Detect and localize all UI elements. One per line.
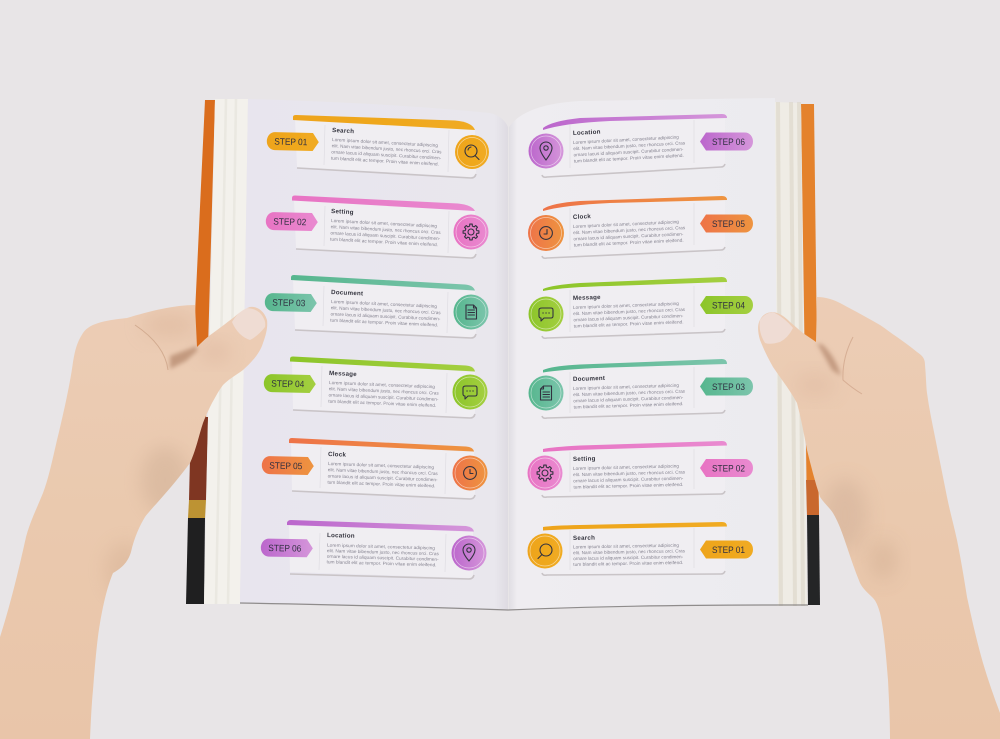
step card: Setting (left): tum blandit elit ac tempor. Proin vitae enim eleifend. bbox=[330, 237, 438, 247]
right page bbox=[509, 98, 778, 610]
step card: Clock (left) bbox=[262, 438, 488, 499]
step card: Setting (left): ornare lacus id aliquam suscipit. Curabitur condimen- bbox=[330, 230, 441, 241]
step card: Message (left): elit. Nam vitae bibendum justo, nec rhoncus orci. Cras bbox=[329, 386, 440, 396]
step card: Document (left): Document bbox=[331, 289, 363, 297]
right page stack bbox=[774, 102, 807, 606]
step card: Setting (left): Setting bbox=[331, 208, 354, 216]
step card: Location (left): tum blandit elit ac tempor. Proin vitae enim eleifend. bbox=[327, 559, 437, 567]
step card: Location (right): ornare lacus id aliquam suscipit. Curabitur condimen- bbox=[573, 147, 684, 157]
step card: Document (left): STEP 03 bbox=[272, 298, 305, 308]
left hand bbox=[0, 290, 280, 739]
step card: Search (right): tum blandit elit ac tempor. Proin vitae enim eleifend. bbox=[573, 560, 683, 567]
step card: Document (left): ornare lacus id aliquam suscipit. Curabitur condimen- bbox=[330, 311, 441, 321]
step card: Clock (left): ornare lacus id aliquam suscipit. Curabitur condimen- bbox=[328, 473, 438, 482]
step card: Document (right): elit. Nam vitae bibendum justo, nec rhoncus orci. Cras bbox=[573, 389, 686, 397]
step card: Clock (left): Lorem ipsum dolor sit amet, consectetur adipiscing bbox=[328, 461, 435, 470]
step card: Message (right) bbox=[528, 277, 753, 338]
step card: Location (left): Lorem ipsum dolor sit amet, consectetur adipiscing bbox=[327, 543, 436, 551]
step card: Search (right): Lorem ipsum dolor sit amet, consectetur adipiscing bbox=[573, 543, 680, 549]
step card: Message (right): Message bbox=[573, 294, 601, 302]
step card: Document (right): tum blandit elit ac tempor. Proin vitae enim eleifend. bbox=[573, 401, 684, 410]
step card: Message (left): Lorem ipsum dolor sit amet, consectetur adipiscing bbox=[329, 380, 436, 389]
step card: Search (left): Lorem ipsum dolor sit amet, consectetur adipiscing bbox=[332, 137, 439, 148]
step card: Clock (right): elit. Nam vitae bibendum justo, nec rhoncus orci. Cras bbox=[573, 225, 686, 235]
step card: Search (right) bbox=[528, 522, 753, 575]
step card: Clock (right): tum blandit elit ac tempor. Proin vitae enim eleifend. bbox=[574, 238, 684, 248]
step card: Message (left) bbox=[264, 356, 488, 418]
step card: Location (left): Location bbox=[327, 532, 355, 540]
step card: Search (left): STEP 01 bbox=[274, 137, 307, 147]
step card: Clock (right) bbox=[528, 196, 753, 258]
step card: Setting (right): Setting bbox=[573, 455, 596, 463]
step card: Setting (right): elit. Nam vitae bibendum justo, nec rhoncus orci. Cras bbox=[573, 469, 686, 477]
step card: Document (right): Lorem ipsum dolor sit amet, consectetur adipiscing bbox=[573, 383, 679, 391]
step card: Clock (right): ornare lacus id aliquam suscipit. Curabitur condimen- bbox=[573, 231, 684, 241]
step card: Document (left): tum blandit elit ac tempor. Proin vitae enim eleifend. bbox=[330, 318, 438, 327]
step card: Setting (right): STEP 02 bbox=[712, 463, 745, 473]
step card: Setting (left) bbox=[266, 196, 488, 258]
step card: Search (left): tum blandit elit ac tempor. Proin vitae enim eleifend. bbox=[331, 156, 439, 167]
step card: Message (right): STEP 04 bbox=[712, 300, 745, 310]
step card: Search (left): ornare lacus id aliquam suscipit. Curabitur condimen- bbox=[331, 149, 442, 161]
right cover spine bbox=[801, 104, 820, 605]
book bbox=[186, 98, 820, 610]
step card: Setting (right): ornare lacus id aliquam suscipit. Curabitur condimen- bbox=[573, 476, 684, 483]
step card: Document (right): Document bbox=[573, 375, 605, 383]
step card: Location (right): STEP 06 bbox=[712, 137, 745, 147]
step card: Location (left): STEP 06 bbox=[268, 543, 301, 554]
step card: Search (right): Search bbox=[573, 535, 595, 542]
step card: Search (right): elit. Nam vitae bibendum justo, nec rhoncus orci. Cras bbox=[573, 548, 686, 555]
step card: Search (right): ornare lacus id aliquam suscipit. Curabitur condimen- bbox=[573, 554, 684, 561]
step card: Message (right): ornare lacus id aliquam suscipit. Curabitur condimen- bbox=[573, 313, 684, 322]
step card: Location (left) bbox=[261, 520, 486, 579]
step card: Location (left): ornare lacus id aliquam suscipit. Curabitur condimen- bbox=[327, 554, 439, 562]
step card: Document (left): elit. Nam vitae bibendum justo, nec rhoncus orci. Cras bbox=[331, 305, 442, 315]
right hand bbox=[758, 297, 1000, 739]
step card: Setting (right): Lorem ipsum dolor sit amet, consectetur adipiscing bbox=[573, 463, 680, 471]
step card: Location (right): tum blandit elit ac tempor. Proin vitae enim eleifend. bbox=[574, 153, 684, 164]
step card: Clock (right): Lorem ipsum dolor sit amet, consectetur adipiscing bbox=[573, 219, 679, 229]
step card: Setting (right): tum blandit elit ac tempor. Proin vitae enim eleifend. bbox=[573, 482, 683, 490]
left page bbox=[240, 99, 508, 610]
step card: Location (right): Location bbox=[573, 129, 601, 137]
step card: Search (left) bbox=[267, 115, 489, 178]
step card: Message (right): Lorem ipsum dolor sit amet, consectetur adipiscing bbox=[573, 301, 679, 310]
step card: Document (left): Lorem ipsum dolor sit amet, consectetur adipiscing bbox=[331, 299, 438, 309]
step card: Clock (right): Clock bbox=[573, 213, 591, 221]
step card: Document (right): ornare lacus id aliquam suscipit. Curabitur condimen- bbox=[573, 395, 684, 403]
step card: Message (right): elit. Nam vitae bibendum justo, nec rhoncus orci. Cras bbox=[573, 307, 686, 316]
step card: Setting (left): elit. Nam vitae bibendum justo, nec rhoncus orci. Cras bbox=[331, 224, 441, 235]
step card: Search (left): Search bbox=[332, 127, 354, 135]
step card: Document (right): STEP 03 bbox=[712, 382, 745, 392]
step card: Message (left): Message bbox=[329, 370, 357, 378]
bottom edge of pages bbox=[240, 603, 808, 610]
left page stack bbox=[204, 99, 248, 604]
step card: Location (right): Lorem ipsum dolor sit amet, consectetur adipiscing bbox=[573, 134, 679, 145]
step card: Setting (right) bbox=[528, 441, 753, 497]
step card: Message (left): ornare lacus id aliquam suscipit. Curabitur condimen- bbox=[328, 392, 439, 402]
step card: Clock (left): elit. Nam vitae bibendum justo, nec rhoncus orci. Cras bbox=[328, 467, 439, 476]
step card: Document (left) bbox=[265, 275, 488, 338]
infographic steps bbox=[261, 114, 753, 579]
thumbnail right bbox=[760, 312, 793, 344]
step card: Setting (left): STEP 02 bbox=[273, 217, 306, 227]
step card: Document (right) bbox=[528, 359, 753, 418]
step card: Clock (left): Clock bbox=[328, 451, 347, 459]
step card: Message (right): tum blandit elit ac tempor. Proin vitae enim eleifend. bbox=[574, 319, 684, 329]
step card: Clock (left): STEP 05 bbox=[269, 461, 302, 471]
step card: Search (left): elit. Nam vitae bibendum justo, nec rhoncus orci. Cras bbox=[332, 143, 442, 154]
step card: Location (right): elit. Nam vitae bibendum justo, nec rhoncus orci. Cras bbox=[573, 140, 686, 151]
thumbnail left bbox=[232, 308, 265, 340]
step card: Clock (right): STEP 05 bbox=[712, 219, 745, 229]
step card: Search (right): STEP 01 bbox=[712, 545, 745, 555]
step card: Location (left): elit. Nam vitae bibendum justo, nec rhoncus orci. Cras bbox=[327, 548, 440, 556]
step card: Message (left): STEP 04 bbox=[271, 379, 304, 389]
left cover spine bbox=[186, 100, 215, 604]
step card: Location (right) bbox=[528, 114, 753, 177]
step card: Setting (left): Lorem ipsum dolor sit amet, consectetur adipiscing bbox=[331, 218, 438, 229]
step card: Clock (left): tum blandit elit ac tempor. Proin vitae enim eleifend. bbox=[327, 480, 435, 488]
step card: Message (left): tum blandit elit ac tempor. Proin vitae enim eleifend. bbox=[328, 399, 436, 408]
